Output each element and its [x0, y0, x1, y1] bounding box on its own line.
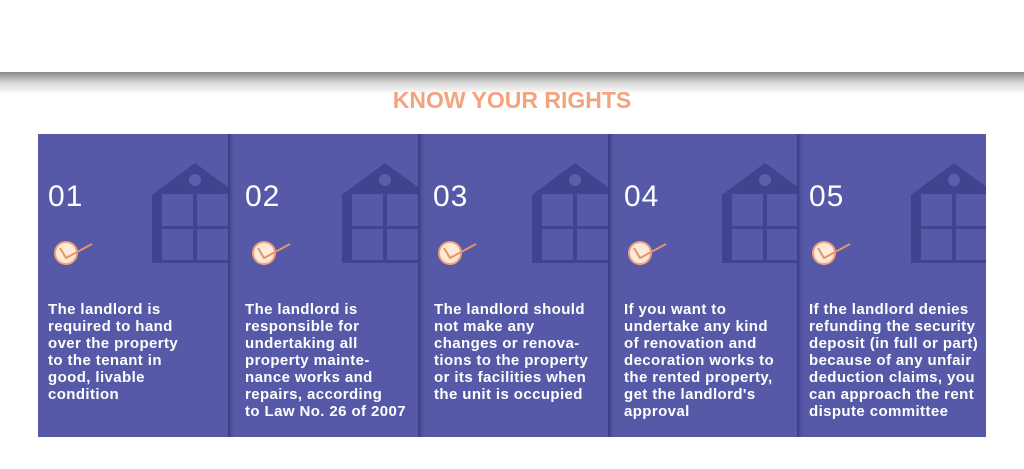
text 1: over the property — [48, 335, 178, 352]
text 3: tions to the property — [434, 352, 588, 369]
text 2: property mainte- — [245, 352, 370, 369]
text 1: required to hand — [48, 318, 173, 335]
title: KNOW YOUR RIGHTS — [393, 87, 631, 113]
text 5: can approach the rent — [809, 386, 974, 403]
panel 1 — [55, 163, 240, 264]
number 05: 05 — [809, 180, 844, 213]
text 1 — [48, 301, 178, 403]
panel 2 — [228, 134, 430, 437]
text 4: the rented property, — [624, 369, 773, 386]
text 4 — [624, 301, 774, 420]
number 04: 04 — [624, 180, 659, 213]
text 4: get the landlord's — [624, 386, 756, 403]
number 02: 02 — [245, 180, 280, 213]
text 5: refunding the security — [809, 318, 975, 335]
text 3: the unit is occupied — [434, 386, 583, 403]
text 4: of renovation and — [624, 335, 757, 352]
top shadow band — [0, 72, 1024, 94]
text 5 — [809, 301, 978, 420]
text 3: The landlord should — [434, 301, 585, 318]
text 2: repairs, according — [245, 386, 382, 403]
text 2 — [245, 301, 406, 420]
text 4: decoration works to — [624, 352, 774, 369]
text 4: approval — [624, 403, 690, 420]
text 1: to the tenant in — [48, 352, 162, 369]
text 2: nance works and — [245, 369, 373, 386]
text 3 — [434, 301, 588, 403]
text 3: or its facilities when — [434, 369, 586, 386]
panel 3 — [418, 134, 620, 437]
text 2: The landlord is — [245, 301, 358, 318]
panels graphic — [38, 134, 986, 437]
panel 4 — [608, 134, 810, 437]
text 1: condition — [48, 386, 119, 403]
text 2: responsible for — [245, 318, 359, 335]
text 4: If you want to — [624, 301, 726, 318]
number 03: 03 — [433, 180, 468, 213]
text 3: changes or renova- — [434, 335, 580, 352]
number 01: 01 — [48, 180, 83, 213]
text 2: to Law No. 26 of 2007 — [245, 403, 406, 420]
text 5: dispute committee — [809, 403, 948, 420]
text 2: undertaking all — [245, 335, 358, 352]
text 4: undertake any kind — [624, 318, 768, 335]
panel 5 — [797, 134, 999, 437]
text 1: The landlord is — [48, 301, 161, 318]
text 1: good, livable — [48, 369, 145, 386]
text 5: deposit (in full or part) — [809, 335, 978, 352]
text 5: If the landlord denies — [809, 301, 969, 318]
text 3: not make any — [434, 318, 535, 335]
text 5: because of any unfair — [809, 352, 972, 369]
text 5: deduction claims, you — [809, 369, 975, 386]
